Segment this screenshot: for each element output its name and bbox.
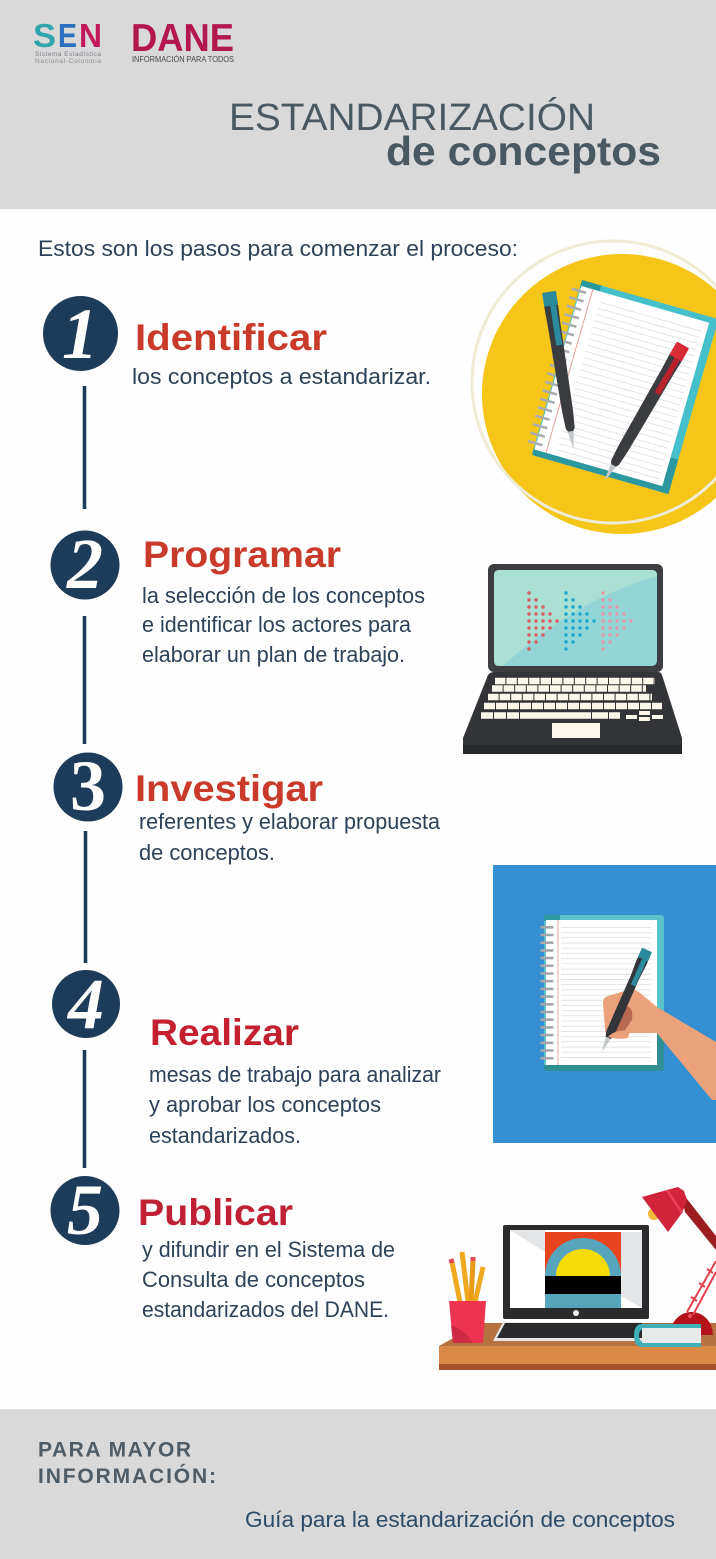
step 5 marker: 5	[67, 1170, 103, 1250]
step 1 text: los conceptos a estandarizar.	[132, 364, 431, 389]
step 1 text: Identificar	[135, 317, 327, 358]
step 3 text: referentes y elaborar propuesta	[139, 809, 441, 834]
header band	[0, 0, 716, 209]
step 4 marker: 4	[66, 964, 104, 1044]
illustration: hand writing on blue panel	[493, 865, 716, 1143]
intro text: Estos son los pasos para comenzar el proceso:	[38, 236, 518, 261]
connector 4 to 5	[83, 1050, 86, 1168]
step 4 marker	[52, 964, 120, 1044]
connector 3 to 4	[84, 831, 87, 963]
logo: SEN: N	[79, 17, 102, 54]
logo: SEN: Sistema Estadística	[35, 51, 101, 58]
step 2 marker: 2	[66, 524, 103, 604]
step 3 text: Investigar	[135, 768, 323, 809]
step 1 text	[132, 317, 431, 389]
step 1 marker	[43, 294, 118, 374]
step 1 marker: 1	[62, 294, 98, 374]
pen: teal	[542, 291, 580, 448]
pen: red	[599, 342, 689, 483]
step 5 marker	[50, 1170, 120, 1250]
lamp	[642, 1187, 716, 1335]
step 3 marker	[54, 746, 122, 826]
step 4 text	[149, 1012, 441, 1148]
title	[229, 96, 661, 174]
title: de conceptos	[386, 128, 661, 174]
step 4 text: mesas de trabajo para analizar	[149, 1062, 441, 1087]
logo: DANE: DANE	[131, 17, 234, 60]
step 4 text: estandarizados.	[149, 1123, 301, 1148]
step 2 text: Programar	[143, 534, 341, 575]
keys	[481, 681, 662, 716]
step 2 marker	[50, 524, 120, 604]
book	[634, 1324, 701, 1347]
connector 2 to 3	[83, 616, 86, 744]
step 5 text	[138, 1192, 395, 1322]
computer monitor	[503, 1225, 649, 1319]
connector 1 to 2	[83, 386, 86, 509]
footer heading: PARA MAYOR	[38, 1438, 191, 1462]
title: ESTANDARIZACIÓN	[229, 96, 595, 139]
logo: SEN	[33, 17, 102, 65]
logo: SEN: E	[58, 17, 77, 54]
step 3 text	[135, 768, 441, 865]
step 3 text: de conceptos.	[139, 840, 275, 865]
illustration: desk with computer, lamp, book, pencils	[439, 1187, 716, 1370]
footer heading	[38, 1438, 216, 1488]
step 5 text: Publicar	[138, 1192, 293, 1233]
step 2 text: la selección de los conceptos	[142, 583, 425, 608]
footer heading: INFORMACIÓN:	[38, 1464, 216, 1488]
dot arrows	[529, 593, 631, 650]
step 5 text: y difundir en el Sistema de	[142, 1237, 395, 1262]
illustration: laptop	[463, 564, 682, 754]
step 4 text: y aprobar los conceptos	[149, 1092, 381, 1117]
step 2 text	[142, 534, 425, 667]
step 3 marker: 3	[70, 746, 106, 826]
hand	[603, 989, 716, 1100]
pencil cup	[449, 1301, 486, 1343]
step 2 text: e identificar los actores para	[142, 612, 412, 637]
step 2 text: elaborar un plan de trabajo.	[142, 642, 405, 667]
footer link text: Guía para la estandarización de conceptos	[245, 1507, 675, 1532]
logo: DANE: INFORMACIÓN PARA TODOS	[132, 55, 234, 64]
logo: SEN: Nacional-Colombia	[35, 58, 101, 65]
keyboard	[493, 1322, 642, 1341]
pen	[598, 948, 652, 1053]
illustration: notebook on yellow circle	[472, 241, 716, 534]
logo: SEN: S	[33, 17, 56, 54]
pencils	[451, 1252, 483, 1302]
footer band	[0, 1409, 716, 1559]
step 4 text: Realizar	[150, 1012, 299, 1053]
step 5 text: Consulta de conceptos	[142, 1267, 365, 1292]
step 5 text: estandarizados del DANE.	[142, 1297, 389, 1322]
